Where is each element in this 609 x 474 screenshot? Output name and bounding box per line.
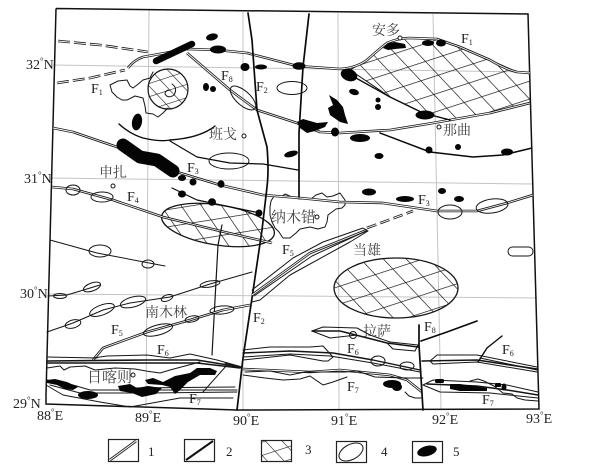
coordinate labels: E — [544, 412, 552, 427]
zone: northern hatched lens — [350, 38, 530, 120]
fault labels: 5 — [119, 329, 123, 338]
lenses on faults — [54, 82, 533, 370]
lake: north-west outline — [110, 72, 168, 117]
coordinate labels: ° — [345, 412, 349, 422]
zone: small hatched circle — [148, 69, 188, 109]
place names: 拉萨 — [363, 323, 391, 340]
coordinate labels: 91 — [331, 414, 345, 429]
coordinate labels — [13, 56, 552, 429]
place names: 申扎 — [99, 164, 127, 181]
fault F4 — [52, 187, 272, 243]
legend item 2: thick fault: 2 — [226, 444, 232, 459]
coordinate labels: ° — [38, 170, 42, 180]
fault labels: F — [424, 320, 432, 335]
coordinate labels: N — [31, 397, 41, 412]
coordinate labels: ° — [446, 411, 450, 421]
fault labels: F — [157, 343, 165, 358]
hatched zones — [148, 38, 530, 318]
lakes — [110, 72, 345, 238]
fault labels: F — [502, 343, 510, 358]
coordinate labels: E — [55, 409, 63, 424]
coordinate labels: 89 — [135, 411, 149, 426]
fault labels: F — [127, 190, 135, 205]
legend item 1: double fault: 1 — [148, 444, 154, 459]
legend item 5: ore body: 5 — [453, 444, 460, 459]
fault labels: 6 — [165, 349, 169, 358]
place names: 那曲 — [443, 123, 471, 139]
place names — [87, 23, 471, 386]
fault F3 — [53, 128, 533, 211]
minor faults — [47, 73, 532, 355]
coordinate labels: ° — [247, 412, 251, 422]
coordinate labels: N — [44, 58, 54, 73]
fault labels: 8 — [229, 75, 233, 84]
place names: 安多 — [372, 23, 400, 39]
fault labels: F — [282, 243, 290, 258]
fault labels: 3 — [195, 167, 199, 176]
coordinate labels: ° — [51, 407, 55, 417]
coordinate labels: 32 — [26, 58, 40, 73]
fault labels: F — [347, 342, 355, 357]
place names: 班戈 — [209, 126, 237, 143]
southern fault belts east — [422, 336, 538, 401]
coordinate labels: E — [349, 414, 357, 429]
fault labels: 4 — [135, 196, 139, 205]
coordinate labels: 92 — [432, 413, 446, 428]
fault labels: 1 — [99, 88, 103, 97]
fault labels: F — [418, 193, 426, 208]
fault labels: F — [189, 392, 197, 407]
fault labels: 7 — [490, 399, 494, 408]
fault labels: 1 — [469, 38, 473, 47]
coordinate labels: 93 — [526, 412, 540, 427]
coordinate labels: 90 — [233, 414, 247, 429]
legend item 3: hatched zone: 3 — [305, 442, 312, 457]
fault labels: F — [347, 380, 355, 395]
coordinate labels: N — [42, 172, 52, 187]
coordinate labels: E — [153, 411, 161, 426]
fault labels: 6 — [510, 349, 514, 358]
coordinate labels: N — [38, 287, 48, 302]
map frame — [46, 8, 539, 410]
fault labels: F — [111, 323, 119, 338]
coordinate labels: E — [251, 414, 259, 429]
fault labels: F — [461, 32, 469, 47]
fault labels: F — [256, 80, 264, 95]
fault F8 south — [419, 321, 477, 410]
fault labels: 5 — [290, 249, 294, 258]
fault labels: F — [187, 161, 195, 176]
fault labels: 3 — [426, 199, 430, 208]
zone: southern hatched ellipse — [334, 258, 458, 318]
coordinate labels: ° — [27, 395, 31, 405]
fault labels: 2 — [264, 86, 268, 95]
towns — [111, 36, 441, 377]
place names: 日喀则 — [87, 369, 132, 386]
zone: central hatched ellipse — [159, 196, 277, 254]
fault labels: 6 — [355, 348, 359, 357]
southern fault belts west — [46, 354, 242, 407]
legend item 2: thick fault — [184, 440, 232, 462]
legend — [108, 439, 460, 465]
fault labels: F — [253, 311, 261, 326]
fault labels: F — [482, 393, 490, 408]
place names: 当雄 — [353, 242, 381, 259]
coordinate labels: E — [450, 413, 458, 428]
fault labels: F — [221, 69, 229, 84]
lake: Nam Co outline — [270, 193, 345, 238]
fault F5 — [93, 211, 413, 360]
coordinate labels: ° — [40, 56, 44, 66]
coordinate labels: 31 — [24, 172, 38, 187]
coordinate labels: ° — [149, 409, 153, 419]
fault labels: F — [91, 82, 99, 97]
fault labels: 7 — [355, 386, 359, 395]
fault labels: 2 — [261, 317, 265, 326]
legend item 4: lens — [336, 439, 388, 465]
southern fault belts centre — [243, 327, 423, 398]
fault labels: 7 — [197, 398, 201, 407]
fault labels — [91, 32, 514, 408]
black ore bodies — [47, 32, 513, 399]
coordinate labels: ° — [34, 285, 38, 295]
place names: 纳木错 — [271, 208, 316, 226]
coordinate labels: 29 — [13, 397, 27, 412]
legend item 3: hatched zone — [262, 440, 312, 462]
fault F8 north — [187, 53, 530, 133]
legend item 5: ore body — [412, 442, 460, 462]
lens near Lhasa — [312, 327, 418, 351]
place names: 南木林 — [145, 304, 187, 321]
legend item 1: double fault — [108, 440, 154, 462]
map grid — [48, 10, 537, 410]
coordinate labels: 88 — [37, 409, 51, 424]
legend item 4: lens: 4 — [381, 444, 388, 459]
coordinate labels: ° — [540, 410, 544, 420]
fault F2 — [237, 13, 309, 410]
coordinate labels: 30 — [20, 287, 34, 302]
fault F1 — [57, 38, 530, 83]
fault labels: 8 — [432, 326, 436, 335]
